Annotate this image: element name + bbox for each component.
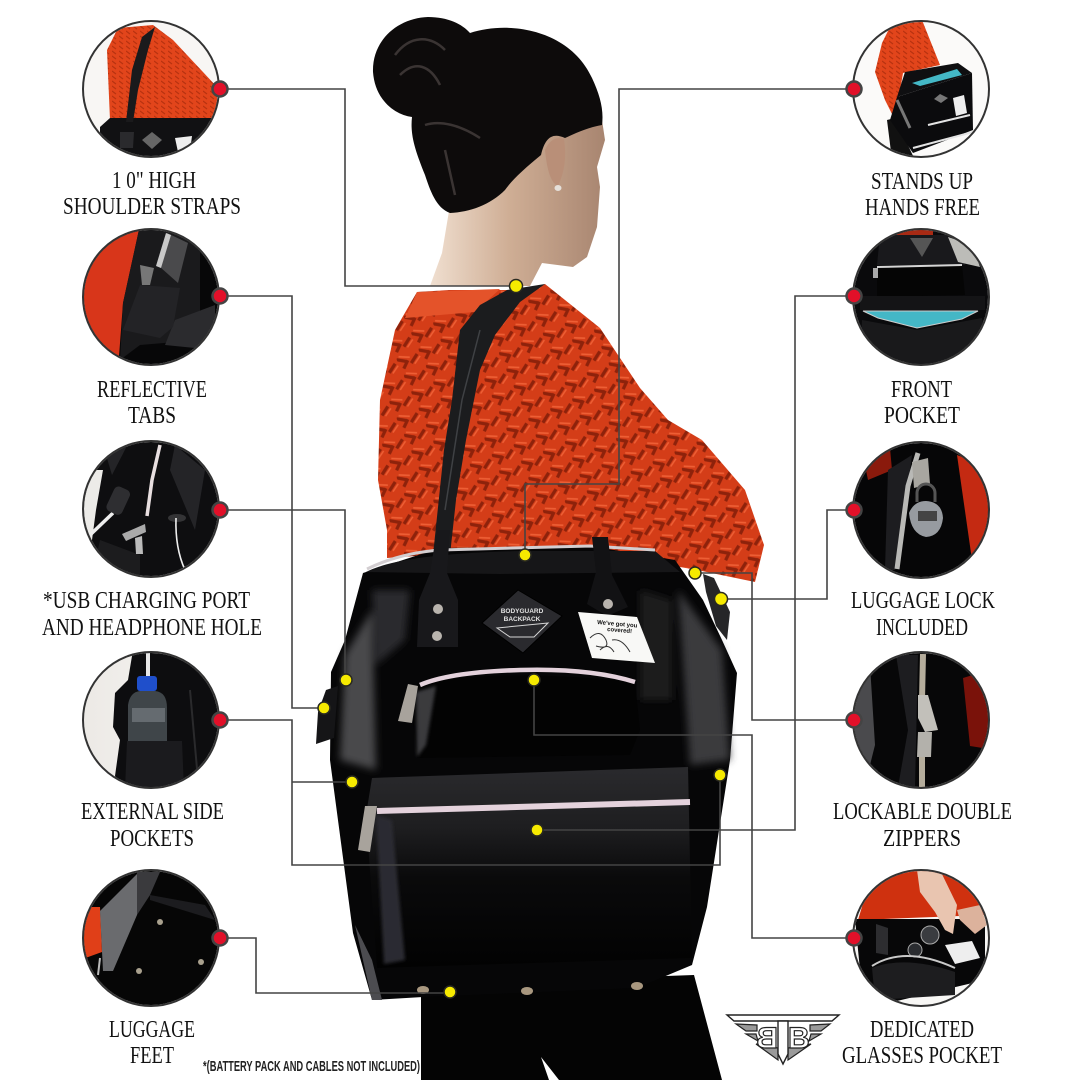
red marker (212, 82, 228, 96)
label: FRONT (891, 377, 952, 403)
label: GLASSES POCKET (842, 1043, 1002, 1069)
circle outline (83, 870, 219, 1006)
red marker (846, 82, 862, 96)
label: INCLUDED (876, 615, 968, 641)
panel: luggage lock (846, 440, 996, 641)
panel: reflective tabs (80, 225, 228, 429)
label: AND HEADPHONE HOLE (42, 615, 262, 641)
footnote: *(BATTERY PACK AND CABLES NOT INCLUDED) (203, 1058, 420, 1075)
right grab handle (587, 537, 628, 616)
large pocket (366, 767, 692, 968)
red marker (846, 502, 862, 518)
side tabs (316, 686, 338, 744)
hang tag (578, 612, 655, 663)
small zipper pull (398, 684, 418, 723)
circle outline (83, 229, 219, 365)
backpack (316, 530, 737, 1000)
label: TABS (128, 403, 176, 429)
diamond badge: BACKPACK (504, 616, 541, 623)
yellow callout points (318, 280, 728, 998)
label: 1 0" HIGH (112, 168, 196, 194)
panel: lockable double zippers (833, 650, 1012, 852)
photo: lock (854, 443, 988, 577)
pocket left sheen (376, 815, 405, 964)
photo: glasses pocket (855, 871, 988, 1005)
label: HANDS FREE (865, 195, 980, 221)
label: REFLECTIVE (97, 377, 207, 403)
rivets (432, 599, 613, 641)
diamond badge: BODYGUARD (501, 608, 544, 615)
lower left sheen (355, 925, 382, 1000)
photo: reflective tabs (84, 230, 218, 364)
hang tag: We've got you (597, 620, 638, 630)
label: SHOULDER STRAPS (63, 194, 241, 220)
neck and face (430, 120, 605, 286)
top zipper (367, 546, 655, 569)
label: *USB CHARGING PORT (43, 588, 250, 614)
panel: shoulder straps (63, 20, 241, 220)
legs (421, 975, 722, 1080)
diamond badge (482, 590, 562, 653)
red marker (846, 930, 862, 946)
label: LOCKABLE DOUBLE (833, 799, 1012, 825)
top band (366, 551, 680, 574)
photo: zippers (854, 653, 988, 787)
logo: winged BB: B (756, 1022, 778, 1055)
logo: winged BB (727, 1015, 839, 1064)
side zipper lock (703, 574, 730, 640)
large zipper (377, 802, 690, 811)
sweater collar (405, 289, 500, 318)
red marker (846, 288, 862, 304)
label: POCKET (884, 403, 960, 429)
photo: stands up (875, 22, 973, 156)
small pocket sheen (416, 686, 436, 757)
sweater (378, 284, 764, 582)
red marker (212, 930, 228, 946)
label: LUGGAGE (109, 1017, 195, 1043)
photo: shoulder straps (84, 22, 217, 156)
woman figure (373, 17, 764, 1080)
hang tag: covered! (607, 627, 632, 635)
panel: external side pockets (80, 650, 228, 852)
hair highlights (395, 39, 480, 195)
panel: glasses pocket (842, 868, 1002, 1069)
photo: side pocket (84, 653, 218, 787)
side sheens (340, 590, 730, 770)
circle outline (83, 652, 219, 788)
red marker (846, 712, 862, 728)
panel: usb charging port (42, 440, 262, 641)
photo: front pocket (854, 230, 988, 364)
shoulder strap (433, 284, 545, 555)
label: POCKETS (110, 826, 194, 852)
left grab handle (417, 530, 458, 647)
label: LUGGAGE LOCK (851, 588, 996, 614)
red marker (212, 502, 228, 518)
label: STANDS UP (871, 169, 973, 195)
panel: stands up (846, 20, 995, 221)
circle outline (83, 441, 219, 577)
circle outline (853, 870, 989, 1006)
large zipper pull (358, 806, 377, 852)
circle outline (853, 21, 989, 157)
photo: usb port (84, 442, 218, 576)
small zipper (420, 670, 635, 685)
photo: feet (84, 871, 218, 1005)
panel: front pocket (846, 225, 995, 429)
connector lines (220, 89, 854, 993)
label: ZIPPERS (883, 826, 961, 852)
feet (417, 982, 643, 995)
label: EXTERNAL SIDE (81, 799, 224, 825)
logo: winged BB: B (788, 1022, 810, 1055)
label: DEDICATED (870, 1017, 974, 1043)
circle outline (83, 21, 219, 157)
red marker (212, 712, 228, 728)
hair (373, 17, 603, 213)
circle outline (853, 652, 989, 788)
bag body (330, 546, 737, 1000)
panel: luggage feet (80, 868, 228, 1069)
label: FEET (130, 1043, 174, 1069)
small pocket (413, 675, 640, 758)
circle outline (853, 229, 989, 365)
strap gap (445, 330, 480, 510)
red marker (212, 288, 228, 304)
ear and earring (545, 138, 565, 191)
circle outline (853, 442, 989, 578)
